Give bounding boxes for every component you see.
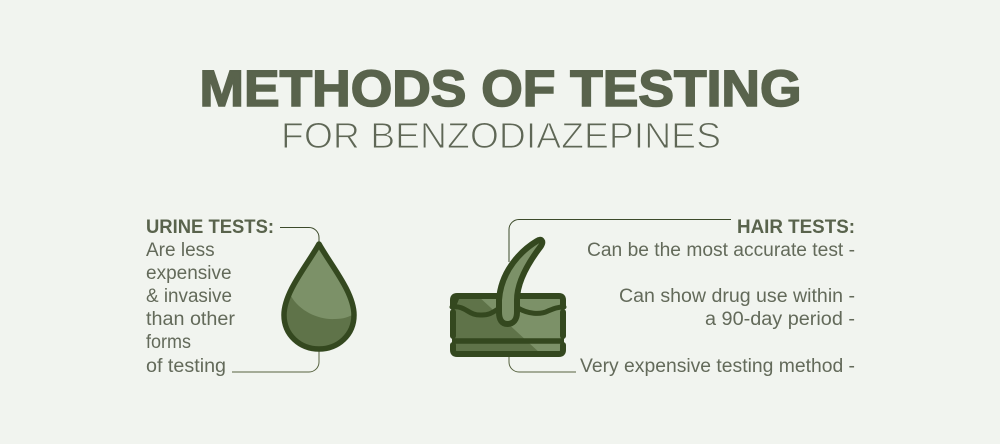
urine tests text: & invasive	[146, 286, 232, 307]
urine tests text: expensive	[146, 263, 232, 284]
drop outline	[284, 244, 354, 349]
urine tests text: than other	[146, 309, 236, 330]
urine tests text: forms	[146, 332, 191, 353]
skin outline	[453, 296, 563, 354]
urine heading: URINE TESTS:	[146, 217, 274, 238]
connector: drop to urine text	[232, 350, 319, 372]
connector: urine heading to drop	[280, 228, 319, 244]
connector: hair heading to follicle	[509, 220, 731, 262]
skin block	[453, 296, 563, 354]
skin layer line	[452, 338, 564, 344]
hair tests text: Can be the most accurate test -	[587, 240, 855, 261]
drop shadow area	[284, 296, 354, 349]
icon: urine drop	[284, 244, 354, 349]
title: METHODS OF TESTING	[200, 60, 802, 117]
icon: hair follicle	[452, 240, 564, 354]
skin wave	[452, 307, 564, 315]
urine tests text	[146, 217, 274, 377]
hair heading: HAIR TESTS:	[737, 217, 855, 238]
hair tests text	[580, 217, 855, 377]
skin highlight	[478, 296, 563, 354]
hair tests text: Can show drug use within -	[619, 286, 855, 307]
urine tests text: Are less	[146, 240, 215, 261]
connector: skin to hair text	[509, 356, 576, 372]
hair tests text: Very expensive testing method -	[580, 356, 855, 377]
urine tests text: of testing	[146, 356, 226, 377]
hair strand	[499, 240, 542, 324]
subtitle: FOR BENZODIAZEPINES	[281, 115, 721, 156]
hair tests text: a 90-day period -	[705, 309, 855, 330]
